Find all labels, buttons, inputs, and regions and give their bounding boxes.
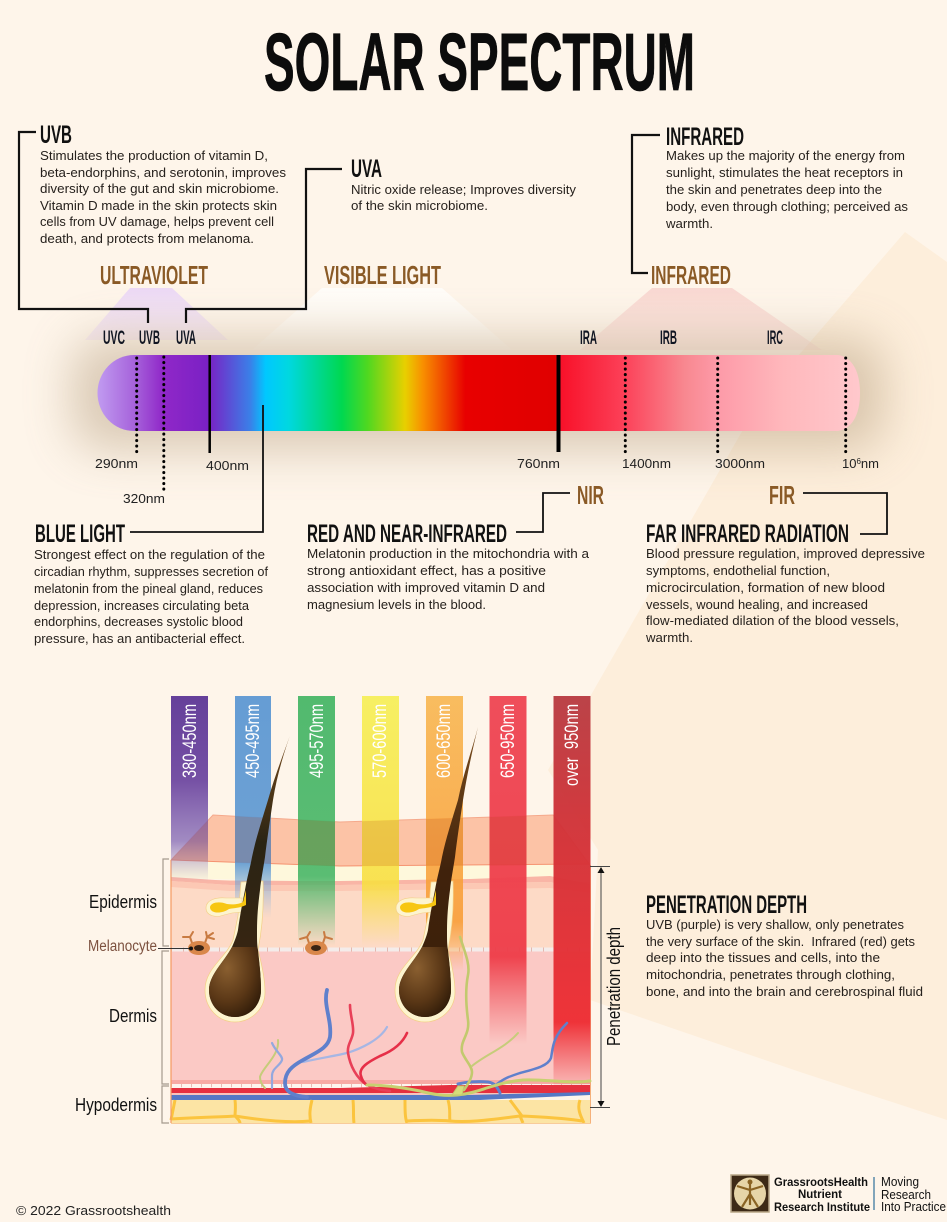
wavelength labels: 6 [856, 457, 861, 466]
layer label: Melanocyte: Melanocyte [88, 938, 157, 955]
callout: far infrared radiation: warmth. [645, 631, 693, 645]
callout: blue light: pressure, has an antibacterial effect. [34, 632, 245, 646]
wavelength labels: 10 [842, 456, 856, 471]
connector lines [19, 132, 887, 534]
wavelength labels: 3000nm [715, 456, 765, 471]
text block: penetration depth: bone, and into the brain and cerebrospinal fluid [646, 985, 923, 999]
callout: far infrared radiation: microcirculation, formation of new blood [646, 581, 885, 595]
callout: infrared: warmth. [665, 217, 713, 231]
callout: blue light: depression, increases circulating beta [34, 599, 249, 613]
wavelength column: 650-950nm: 650-950nm [498, 704, 519, 778]
logo [731, 1175, 946, 1214]
callout: red and near-infrared: RED AND NEAR-INFRARED [307, 520, 507, 548]
logo: GrassrootsHealth [774, 1175, 868, 1189]
region heading: infrared: INFRARED [651, 260, 731, 290]
wavelength column: 450-495nm [235, 696, 271, 918]
logo: Research Institute [774, 1200, 870, 1214]
callout: far infrared radiation: symptoms, endothelial function, [646, 564, 830, 578]
logo: Nutrient [798, 1187, 842, 1201]
callout: red and near-infrared [307, 520, 589, 612]
callout: red and near-infrared: association with improved vitamin D and [307, 581, 545, 595]
wavelength labels: 760nm [517, 456, 560, 471]
callout: infrared: sunlight, stimulates the heat receptors in [666, 166, 903, 180]
wavelength column: over 950nm [554, 696, 590, 1094]
callout: far infrared radiation: vessels, wound healing, and increased [646, 598, 868, 612]
logo: Moving [881, 1175, 919, 1189]
wavelength column: 570-600nm: 570-600nm [370, 704, 391, 778]
callout: UVB: Stimulates the production of vitamin D, [40, 149, 268, 163]
callout: UVB: beta-endorphins, and serotonin, improves [40, 166, 286, 180]
wavelength column: 495-570nm: 495-570nm [307, 704, 328, 778]
callout: UVA: UVA [351, 155, 382, 183]
text block: penetration depth [646, 891, 923, 999]
layer label: Epidermis: Epidermis [89, 892, 157, 912]
callout: far infrared radiation [645, 520, 925, 645]
callout: infrared: Makes up the majority of the energy from [666, 149, 905, 163]
callout: blue light: BLUE LIGHT [35, 520, 125, 548]
callout: UVA: of the skin microbiome. [351, 199, 488, 213]
callout: red and near-infrared: magnesium levels in the blood. [307, 598, 486, 612]
melanocyte left [183, 932, 214, 955]
callout: blue light: circadian rhythm, suppresses secretion of [34, 565, 269, 579]
spectrum backdrop mountains [85, 288, 822, 350]
layer label: Hypodermis: Hypodermis [75, 1095, 157, 1115]
callout: UVB: cells from UV damage, helps prevent cell [40, 215, 274, 229]
wavelength column: 570-600nm [362, 696, 399, 946]
callout: infrared: the skin and penetrates deep into the [666, 183, 882, 197]
callout: blue light: Strongest effect on the regulation of the [34, 548, 265, 562]
wavelength labels: nm [861, 456, 879, 471]
callout: infrared: body, even through clothing; perceived as [666, 200, 908, 214]
callout: UVA [351, 155, 577, 213]
wavelength column: 380-450nm: 380-450nm [180, 704, 201, 778]
melanocyte right [300, 932, 332, 955]
skin surface tint over columns [171, 816, 526, 866]
callout: blue light: endorphins, decreases systolic blood [34, 615, 243, 629]
callout: red and near-infrared: strong antioxidant effect, has a positive [307, 564, 546, 578]
callout: infrared [665, 123, 908, 231]
penetration depth arrow: Penetration depth [604, 927, 624, 1046]
layer brackets [162, 859, 169, 1123]
text block: penetration depth: the very surface of the skin. Infrared (red) gets [646, 935, 915, 949]
vessels and nerves [260, 937, 590, 1097]
wavelength column: over 950nm: over 950nm [562, 704, 583, 786]
text block: penetration depth: mitochondria, penetrates through clothing, [646, 968, 895, 982]
wavelength markers [137, 355, 846, 490]
wavelength column: 450-495nm: 450-495nm [243, 704, 264, 778]
label: FIR: FIR [769, 480, 795, 510]
wavelength labels: 1400nm [622, 456, 671, 471]
band labels: IRA [580, 328, 597, 349]
wavelength labels: 400nm [206, 458, 249, 473]
callout: UVB: Vitamin D made in the skin protects skin [40, 199, 277, 213]
wavelength column: 600-650nm: 600-650nm [434, 704, 455, 778]
band labels [103, 328, 783, 349]
text block: penetration depth: UVB (purple) is very shallow, only penetrates [646, 918, 904, 932]
callout: UVB: UVB [40, 121, 72, 149]
text block: penetration depth: PENETRATION DEPTH [646, 891, 807, 919]
callout: UVA: Nitric oxide release; Improves diversity [351, 183, 577, 197]
logo: Research [881, 1188, 931, 1202]
wavelength column: 600-650nm [426, 696, 463, 971]
callout: blue light: melatonin from the pineal gland, reduces [34, 582, 263, 596]
wavelength column: 650-950nm [490, 696, 526, 1044]
wavelength column: 495-570nm [298, 696, 335, 946]
wavelength labels: 320nm [123, 491, 165, 506]
band labels: UVB [139, 328, 160, 349]
wavelength column: 380-450nm [171, 696, 208, 882]
band labels: UVA [176, 328, 196, 349]
callout: UVB: death, and protects from melanoma. [40, 232, 254, 246]
callout: red and near-infrared: Melatonin production in the mitochondria with a [307, 547, 589, 561]
skin cross-section [171, 815, 591, 1124]
wavelength labels [95, 456, 879, 506]
callout: UVB [40, 121, 286, 246]
callout: far infrared radiation: Blood pressure regulation, improved depressive [646, 547, 925, 561]
text: IRC [767, 328, 783, 349]
callout: infrared: INFRARED [666, 123, 744, 151]
wavelength labels: 290nm [95, 456, 138, 471]
band labels: IRB [660, 328, 677, 349]
text block: penetration depth: deep into the tissues and cells, into the [646, 951, 880, 965]
layer label: Dermis: Dermis [109, 1006, 157, 1026]
hair follicle right [395, 727, 478, 1022]
label: NIR: NIR [577, 480, 604, 510]
penetration depth arrow [590, 866, 624, 1108]
callout: UVB: diversity of the gut and skin microbiome. [40, 182, 279, 196]
region heading: ultraviolet: ULTRAVIOLET [100, 260, 208, 290]
region heading: visible light: VISIBLE LIGHT [324, 260, 441, 290]
hair follicle left [205, 727, 293, 1022]
callout: blue light [34, 520, 269, 646]
band labels: UVC [103, 328, 125, 349]
copyright: © 2022 Grassrootshealth [16, 1203, 171, 1218]
callout: far infrared radiation: flow-mediated dilation of the blood vessels, [646, 614, 899, 628]
panel: spectrum bar [72, 338, 884, 450]
